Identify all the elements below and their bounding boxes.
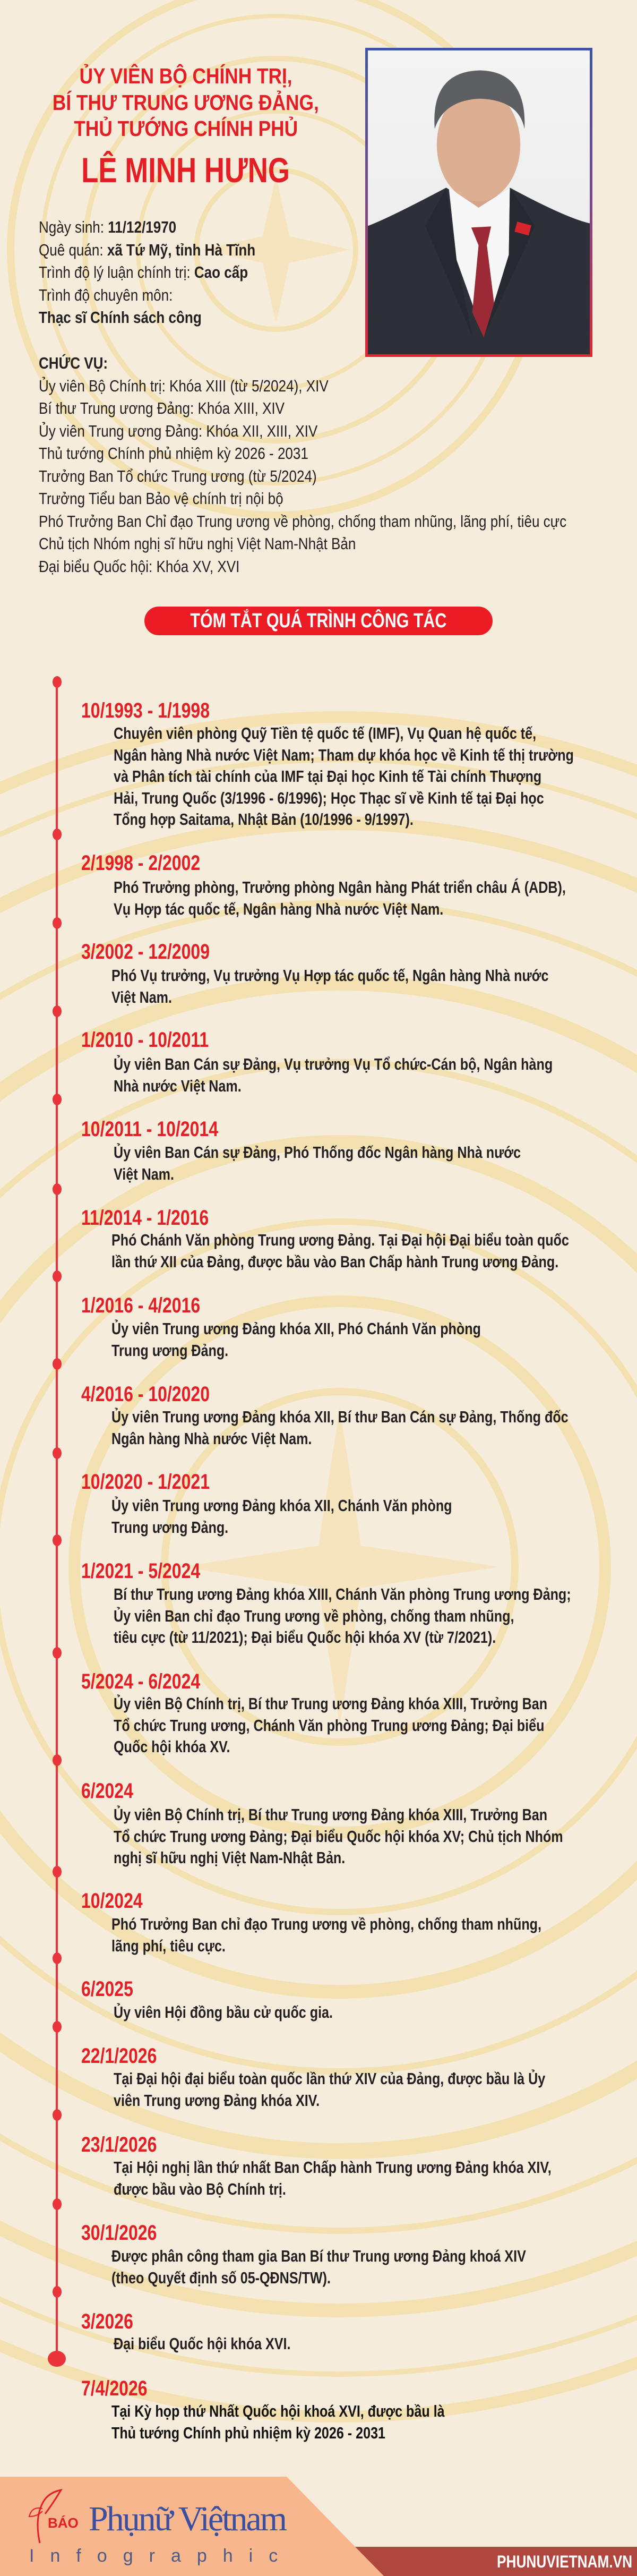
positions list: Chủ tịch Nhóm nghị sĩ hữu nghị Việt Nam-Nhật Bản xyxy=(39,534,356,553)
entry 10 date: 1/2021 - 5/2024 xyxy=(81,1559,200,1583)
entry 9 text xyxy=(111,1496,452,1536)
personal info: Trình độ chuyên môn: xyxy=(39,286,173,304)
entry 19 text xyxy=(111,2402,445,2442)
entry 5 text xyxy=(114,1143,521,1183)
entry 7 text: Ủy viên Trung ương Đảng khóa XII, Phó Chánh Văn phòng xyxy=(111,1319,481,1338)
entry 1 text: Hải, Trung Quốc (3/1996 - 6/1996); Học Thạc sĩ về Kinh tế tại Đại học xyxy=(114,788,544,807)
entry 4 text xyxy=(114,1055,553,1095)
entry 19 text: Thủ tướng Chính phủ nhiệm kỳ 2026 - 2031 xyxy=(111,2423,385,2442)
entry 1 text: và Phân tích tài chính của IMF tại Đại học Kinh tế Tài chính Thượng xyxy=(114,767,541,786)
entry 5 text: Việt Nam. xyxy=(114,1164,174,1183)
entry 2 text xyxy=(114,878,566,918)
entry 19 text: Tại Kỳ họp thứ Nhất Quốc hội khoá XVI, được bầu là xyxy=(111,2402,445,2420)
entry 2 text: Vụ Hợp tác quốc tế, Ngân hàng Nhà nước Việt Nam. xyxy=(114,900,443,918)
personal info: Quê quán: xã Tứ Mỹ, tỉnh Hà Tĩnh xyxy=(39,240,255,259)
positions list: Đại biểu Quốc hội: Khóa XV, XVI xyxy=(39,557,239,576)
entry 7 date: 1/2016 - 4/2016 xyxy=(81,1294,200,1317)
entry 16 text xyxy=(114,2158,552,2198)
entry 2 date: 2/1998 - 2/2002 xyxy=(81,851,200,875)
positions list: Ủy viên Bộ Chính trị: Khóa XIII (từ 5/2024), XIV xyxy=(39,376,329,395)
entry 6 text: Phó Chánh Văn phòng Trung ương Đảng. Tại Đại hội Đại biểu toàn quốc xyxy=(111,1231,569,1249)
entry 13 text xyxy=(111,1915,541,1955)
logo: Infographic xyxy=(29,2546,294,2566)
entry 11 text xyxy=(114,1694,547,1756)
portrait photo xyxy=(365,48,592,357)
entry 11 text: Ủy viên Bộ Chính trị, Bí thư Trung ương Đảng khóa XIII, Trưởng Ban xyxy=(114,1694,547,1713)
entry 9 text: Trung ương Đảng. xyxy=(111,1518,228,1536)
entry 4 text: Ủy viên Ban Cán sự Đảng, Vụ trưởng Vụ Tổ chức-Cán bộ, Ngân hàng xyxy=(114,1055,553,1073)
entry 15 date: 22/1/2026 xyxy=(81,2044,157,2068)
timeline axis xyxy=(48,676,66,2367)
entry 1 date: 10/1993 - 1/1998 xyxy=(81,699,210,722)
entry 1 text: Tổng hợp Saitama, Nhật Bản (10/1996 - 9/1997). xyxy=(114,810,414,829)
entry 11 date: 5/2024 - 6/2024 xyxy=(81,1670,200,1693)
entry 15 text xyxy=(114,2069,546,2110)
entry 15 text: viên Trung ương Đảng khóa XIV. xyxy=(114,2091,320,2110)
entry 10 text: tiêu cực (từ 11/2021); Đại biểu Quốc hội khóa XV (từ 7/2021). xyxy=(114,1628,496,1647)
entry 5 text: Ủy viên Ban Cán sự Đảng, Phó Thống đốc Ngân hàng Nhà nước xyxy=(114,1143,521,1162)
entry 12 date: 6/2024 xyxy=(81,1779,133,1803)
entry 6 text: lần thứ XII của Đảng, được bầu vào Ban Chấp hành Trung ương Đảng. xyxy=(111,1252,558,1270)
entry 11 text: Quốc hội khóa XV. xyxy=(114,1737,230,1756)
entry 2 text: Phó Trưởng phòng, Trưởng phòng Ngân hàng Phát triển châu Á (ADB), xyxy=(114,878,566,897)
entry 8 text: Ngân hàng Nhà nước Việt Nam. xyxy=(111,1429,312,1448)
positions list: Trưởng Tiểu ban Bảo vệ chính trị nội bộ xyxy=(39,489,283,508)
title xyxy=(53,64,319,190)
personal info: Thạc sĩ Chính sách công xyxy=(39,308,202,327)
entry 10 text: Bí thư Trung ương Đảng khóa XIII, Chánh Văn phòng Trung ương Đảng; xyxy=(114,1585,571,1603)
entry 3 text: Việt Nam. xyxy=(111,988,172,1006)
title: BÍ THƯ TRUNG ƯƠNG ĐẢNG, xyxy=(53,90,319,115)
title: THỦ TƯỚNG CHÍNH PHỦ xyxy=(74,116,298,141)
entry 16 text: được bầu vào Bộ Chính trị. xyxy=(114,2180,286,2198)
entry 7 text: Trung ương Đảng. xyxy=(111,1341,228,1360)
entry 19 date: 7/4/2026 xyxy=(81,2377,148,2400)
entry 9 date: 10/2020 - 1/2021 xyxy=(81,1470,210,1494)
entry 8 text: Ủy viên Trung ương Đảng khóa XII, Bí thư Ban Cán sự Đảng, Thống đốc xyxy=(111,1408,569,1426)
personal info: Trình độ lý luận chính trị: Cao cấp xyxy=(39,263,248,282)
entry 6 text xyxy=(111,1231,569,1270)
personal info xyxy=(39,218,255,327)
entry 1 text: Chuyên viên phòng Quỹ Tiền tệ quốc tế (IMF), Vụ Quan hệ quốc tế, xyxy=(114,724,536,743)
entry 12 text: Tổ chức Trung ương Đảng; Đại biểu Quốc hội khóa XV; Chủ tịch Nhóm xyxy=(114,1827,563,1845)
entry 3 text: Phó Vụ trưởng, Vụ trưởng Vụ Hợp tác quốc tế, Ngân hàng Nhà nước xyxy=(111,966,548,985)
positions list: Bí thư Trung ương Đảng: Khóa XIII, XIV xyxy=(39,399,285,417)
entry 8 date: 4/2016 - 10/2020 xyxy=(81,1383,210,1406)
name: LÊ MINH HƯNG xyxy=(82,150,290,190)
entry 14 date: 6/2025 xyxy=(81,1977,133,2001)
entry 12 text: Ủy viên Bộ Chính trị, Bí thư Trung ương Đảng khóa XIII, Trưởng Ban xyxy=(114,1805,547,1824)
entry 16 date: 23/1/2026 xyxy=(81,2133,157,2156)
banner: section heading xyxy=(144,607,493,635)
entry 12 text xyxy=(114,1805,563,1867)
entry 18 text: Đại biểu Quốc hội khóa XVI. xyxy=(114,2334,290,2353)
logo: BÁO xyxy=(48,2515,79,2531)
positions list xyxy=(39,354,566,576)
entry 1 text xyxy=(114,724,574,829)
entry 10 text xyxy=(114,1585,571,1647)
entry 11 text: Tổ chức Trung ương, Chánh Văn phòng Trung ương Đảng; Đại biểu xyxy=(114,1716,544,1735)
entry 15 text: Tại Đại hội đại biểu toàn quốc lần thứ XIV của Đảng, được bầu là Ủy xyxy=(114,2069,545,2088)
positions list: Ủy viên Trung ương Đảng: Khóa XII, XIII, XIV xyxy=(39,422,317,440)
entry 4 date: 1/2010 - 10/2011 xyxy=(81,1028,209,1052)
positions list: CHỨC VỤ: xyxy=(39,354,108,372)
positions list: Phó Trưởng Ban Chỉ đạo Trung ương về phòng, chống tham nhũng, lãng phí, tiêu cực xyxy=(39,512,566,530)
website: PHUNUVIETNAM.VN xyxy=(497,2552,632,2571)
positions list: Trưởng Ban Tổ chức Trung ương (từ 5/2024) xyxy=(39,466,317,485)
banner: section heading: TÓM TẮT QUÁ TRÌNH CÔNG TÁC xyxy=(191,610,446,632)
positions list: Thủ tướng Chính phủ nhiệm kỳ 2026 - 2031 xyxy=(39,444,308,463)
entry 6 date: 11/2014 - 1/2016 xyxy=(81,1206,209,1230)
entry 16 text: Tại Hội nghị lần thứ nhất Ban Chấp hành Trung ương Đảng khóa XIV, xyxy=(114,2158,552,2177)
logo xyxy=(29,2489,294,2566)
personal info: Ngày sinh: 11/12/1970 xyxy=(39,218,176,236)
entry 13 text: lãng phí, tiêu cực. xyxy=(111,1937,226,1955)
entry 3 text xyxy=(111,966,548,1006)
entry 12 text: nghị sĩ hữu nghị Việt Nam-Nhật Bản. xyxy=(114,1848,345,1867)
entry 9 text: Ủy viên Trung ương Đảng khóa XII, Chánh Văn phòng xyxy=(111,1496,452,1515)
entry 17 text xyxy=(111,2247,526,2287)
entry 1 text: Ngân hàng Nhà nước Việt Nam; Tham dự khóa học về Kinh tế thị trường xyxy=(114,746,574,764)
logo: Phụnữ Việtnam xyxy=(89,2500,286,2538)
entry 3 date: 3/2002 - 12/2009 xyxy=(81,940,210,963)
entry 8 text xyxy=(111,1408,569,1448)
entry 10 text: Ủy viên Ban chỉ đạo Trung ương về phòng, chống tham nhũng, xyxy=(114,1606,514,1625)
entry 4 text: Nhà nước Việt Nam. xyxy=(114,1076,242,1095)
entry 18 date: 3/2026 xyxy=(81,2310,133,2333)
entry 7 text xyxy=(111,1319,481,1360)
entry 17 text: Được phân công tham gia Ban Bí thư Trung ương Đảng khoá XIV xyxy=(111,2247,526,2265)
footer xyxy=(0,2477,637,2576)
entry 17 text: (theo Quyết định số 05-QĐNS/TW). xyxy=(111,2268,331,2287)
entry 17 date: 30/1/2026 xyxy=(81,2221,157,2245)
entry 5 date: 10/2011 - 10/2014 xyxy=(81,1118,218,1141)
entry 13 date: 10/2024 xyxy=(81,1889,143,1913)
title: ỦY VIÊN BỘ CHÍNH TRỊ, xyxy=(80,64,292,88)
entry 14 text: Ủy viên Hội đồng bầu cử quốc gia. xyxy=(114,2003,333,2021)
entry 13 text: Phó Trưởng Ban chỉ đạo Trung ương về phòng, chống tham nhũng, xyxy=(111,1915,541,1933)
